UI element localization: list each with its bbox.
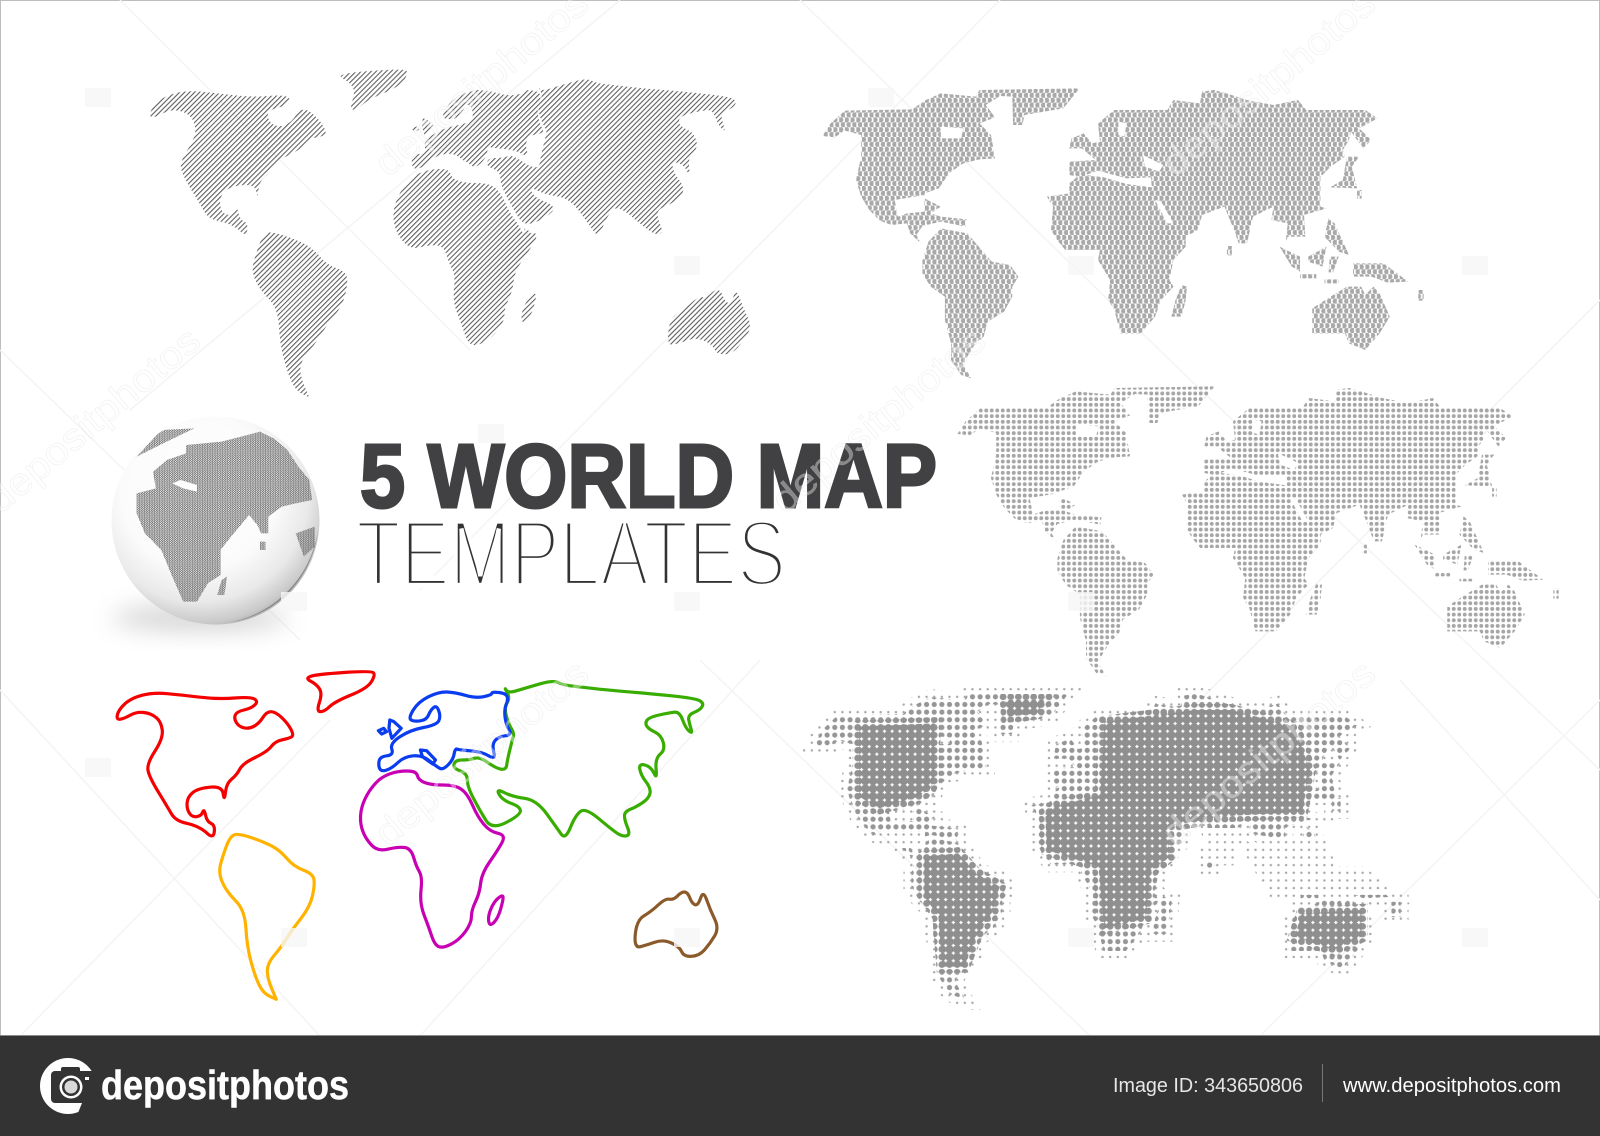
map: small dots [958,386,1559,676]
watermark: depositphotos [764,319,994,522]
map: large dots [824,88,1424,378]
footer bar [0,1035,1600,1136]
watermark camera icons [85,88,1488,947]
icon: dotted globe [112,416,320,630]
title line: TEMPLATES: TEMPLATES [356,501,786,606]
title [356,427,937,606]
website url: www.depositphotos.com [1342,1075,1561,1097]
footer divider [1322,1064,1323,1102]
title line: 5 WORLD MAP: 5 WORLD MAP [360,427,937,527]
map: coloured continent outlines [117,672,717,999]
image id: Image ID: 343650806 [1113,1075,1303,1097]
watermark: depositphotos [367,0,597,185]
watermark: depositphotos [1154,652,1384,855]
map: halftone dots [790,680,1430,1010]
map: diagonal stripes [150,70,750,397]
footer logo icon [40,1058,96,1114]
watermark [0,0,1384,855]
watermark: depositphotos [1154,0,1384,185]
footer logo wordmark: depositphotos [101,1062,349,1108]
watermark: depositphotos [367,652,597,855]
